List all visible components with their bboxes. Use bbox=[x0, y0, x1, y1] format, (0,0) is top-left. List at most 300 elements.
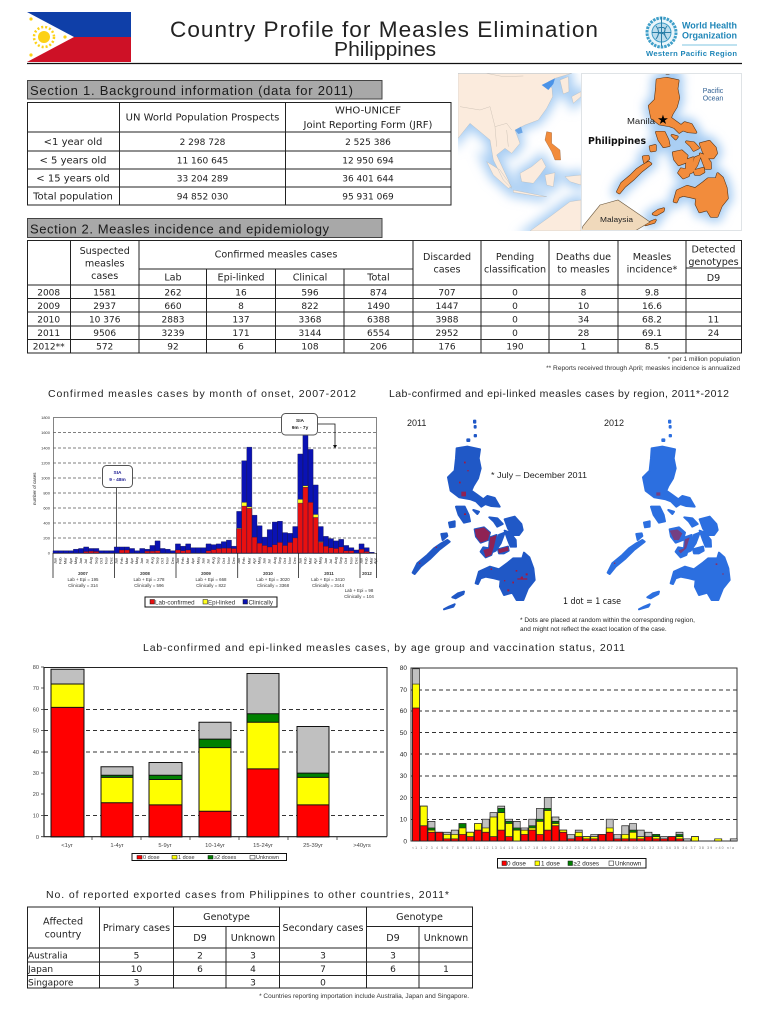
table header: D9 bbox=[193, 933, 207, 944]
x axis month labels: Sep bbox=[278, 557, 282, 564]
table header: Clinical bbox=[293, 272, 327, 284]
x axis month labels: Mar bbox=[247, 557, 251, 564]
icon: WHO logo: Organization bbox=[682, 30, 737, 42]
y axis labels: 200 bbox=[43, 536, 51, 540]
y axis labels: 0 bbox=[48, 550, 51, 556]
table: measles incidence and epidemiology: 171 bbox=[232, 329, 250, 339]
text: Pacific Ocean label: Ocean bbox=[703, 96, 723, 102]
text: Manila label: Manila bbox=[627, 117, 656, 126]
table: background information: 12 950 694 bbox=[342, 156, 394, 166]
table header: incidence* bbox=[627, 264, 678, 276]
year summaries: Lab + Epi = 98 bbox=[345, 588, 374, 593]
y axis labels: 1600 bbox=[41, 430, 51, 435]
table: background information: 33 204 289 bbox=[177, 174, 229, 184]
icon: WHO logo bbox=[646, 17, 737, 58]
x axis month labels: Feb bbox=[120, 557, 124, 564]
table header: D9 bbox=[386, 933, 400, 944]
note: July to December 2011: * July – December 2011 bbox=[491, 470, 587, 480]
x axis month labels: Oct bbox=[283, 557, 287, 564]
x axis month labels: Apr bbox=[130, 557, 134, 564]
y axis labels: 30 bbox=[33, 771, 39, 777]
y axis labels: 50 bbox=[33, 728, 39, 734]
table: exported cases: 3 bbox=[390, 952, 396, 962]
x axis labels: <1yr bbox=[61, 843, 73, 849]
table: measles incidence and epidemiology: 2012** bbox=[33, 342, 65, 352]
table: measles incidence and epidemiology: 3144 bbox=[299, 329, 322, 339]
x axis month labels: Mar bbox=[64, 557, 68, 564]
table header: Suspected bbox=[80, 246, 130, 257]
x axis month labels: Jun bbox=[201, 558, 205, 564]
title bbox=[170, 17, 599, 61]
table: measles incidence and epidemiology: 2883 bbox=[162, 316, 184, 326]
table: measles incidence and epidemiology: 2937 bbox=[93, 302, 116, 312]
y axis labels: 60 bbox=[33, 708, 39, 714]
x axis month labels: Sep bbox=[156, 557, 160, 564]
heading: section 1: Section 1. Background information (data for 2011) bbox=[30, 83, 353, 98]
legend: ≥2 doses bbox=[574, 860, 599, 868]
table: measles incidence and epidemiology: 2009 bbox=[37, 302, 60, 312]
table: measles incidence and epidemiology: 2010 bbox=[37, 316, 60, 326]
maps: cases by region bbox=[407, 418, 730, 633]
y axis labels: 10 bbox=[33, 814, 39, 820]
x axis month labels: May bbox=[258, 557, 262, 564]
table: measles incidence and epidemiology: 69.1 bbox=[642, 329, 662, 339]
legend: Unknown bbox=[615, 860, 642, 868]
table header: Primary cases bbox=[103, 923, 170, 934]
table: measles incidence and epidemiology: 0 bbox=[512, 288, 518, 298]
legend: Unknown bbox=[256, 855, 279, 861]
x axis month labels: Oct bbox=[99, 557, 103, 564]
table: measles incidence and epidemiology: 28 bbox=[578, 329, 589, 339]
y axis labels: 20 bbox=[400, 795, 407, 802]
table header: Joint Reporting Form (JRF) bbox=[303, 120, 433, 131]
y axis labels: 30 bbox=[400, 773, 407, 780]
x axis month labels: Jul bbox=[206, 559, 210, 564]
text: Malaysia label: Malaysia bbox=[600, 215, 634, 224]
year summaries: Lab + Epi = 278 bbox=[133, 577, 165, 582]
x axis month labels bbox=[54, 557, 378, 564]
table: exported cases: 7 bbox=[320, 965, 326, 975]
table header: genotypes bbox=[688, 257, 739, 268]
y axis labels: 0 bbox=[36, 835, 39, 841]
x axis month labels: May bbox=[319, 557, 323, 564]
y axis labels: 1800 bbox=[41, 415, 51, 420]
table: measles incidence and epidemiology bbox=[28, 240, 742, 353]
table: measles incidence and epidemiology: 1581 bbox=[93, 288, 116, 298]
table: measles incidence and epidemiology: 874 bbox=[370, 288, 387, 298]
year summaries: Clinically = 3144 bbox=[312, 583, 345, 588]
table: exported cases: 3 bbox=[250, 952, 256, 962]
x axis month labels: Jun bbox=[263, 558, 267, 564]
note: dots placed at random bbox=[520, 617, 695, 633]
legend: Epi-linked bbox=[208, 600, 236, 606]
icon: WHO logo: Western Pacific Region bbox=[646, 49, 737, 58]
table header bbox=[43, 912, 468, 944]
y axis labels: 80 bbox=[400, 665, 407, 672]
map: 2011 bbox=[407, 418, 535, 609]
year summaries: Clinically = 596 bbox=[134, 583, 164, 588]
x axis labels: 5-9yr bbox=[158, 843, 172, 849]
year summaries: 2011 bbox=[324, 571, 334, 576]
x axis month labels: Jan bbox=[115, 558, 119, 564]
x axis month labels: Feb bbox=[303, 557, 307, 564]
icon: Philippine flag bbox=[27, 12, 131, 62]
table header: Unknown bbox=[424, 933, 468, 944]
table: measles incidence and epidemiology: 10 bbox=[578, 302, 589, 312]
table: background information: 94 852 030 bbox=[177, 192, 229, 202]
icon: WHO logo: World Health bbox=[682, 20, 737, 32]
x axis month labels: Apr bbox=[191, 557, 195, 564]
table: measles incidence and epidemiology: 3988 bbox=[436, 316, 459, 326]
x axis month labels: Dec bbox=[232, 557, 236, 564]
x axis month labels: Nov bbox=[166, 557, 170, 564]
table: measles incidence and epidemiology: 596 bbox=[301, 288, 319, 298]
table header: Detected bbox=[692, 244, 735, 256]
table: measles incidence and epidemiology: 572 bbox=[96, 342, 113, 352]
y axis labels: 20 bbox=[33, 792, 39, 798]
table: measles incidence and epidemiology: 6 bbox=[238, 342, 244, 352]
table: measles incidence and epidemiology: 9506 bbox=[93, 329, 116, 339]
table: measles incidence and epidemiology: 2008 bbox=[37, 288, 60, 298]
legend: 0 dose bbox=[507, 860, 526, 868]
y axis labels: 10 bbox=[400, 816, 407, 824]
table: measles incidence and epidemiology: 0 bbox=[512, 316, 518, 326]
x axis month labels: Oct bbox=[222, 557, 226, 564]
table header: UN World Population Prospects bbox=[126, 112, 279, 124]
stacked bars bbox=[51, 669, 329, 837]
chart: cases by single year of age bbox=[400, 665, 737, 868]
map: Southeast Asia bbox=[458, 73, 581, 231]
table header: Measles bbox=[633, 252, 671, 263]
table header: Lab bbox=[164, 272, 182, 284]
y axis labels: 1000 bbox=[41, 476, 51, 480]
legend: 0 dose bbox=[143, 855, 160, 861]
x axis month labels: Jan bbox=[360, 558, 364, 564]
table: background information bbox=[28, 102, 451, 205]
table: exported cases: 6 bbox=[390, 965, 396, 975]
x axis month labels: Sep bbox=[94, 557, 98, 564]
table: background information: Total population bbox=[32, 192, 113, 202]
stacked bars bbox=[53, 417, 374, 553]
legend bbox=[145, 597, 277, 607]
table header: Total bbox=[366, 272, 390, 284]
table: measles incidence and epidemiology: 68.2 bbox=[642, 316, 662, 326]
y axis title: number of cases bbox=[32, 472, 37, 505]
x axis month labels: Mar bbox=[186, 557, 190, 564]
table header: Affected bbox=[43, 916, 83, 928]
x axis month labels: Feb bbox=[242, 557, 246, 564]
table: exported cases: Australia bbox=[28, 952, 68, 962]
callout: SIA 9-48m bbox=[102, 466, 132, 547]
table header: classification bbox=[484, 264, 546, 276]
x axis month labels: Nov bbox=[104, 557, 108, 564]
table header: Deaths due bbox=[556, 252, 611, 263]
heading: section 2: Section 2. Measles incidence and epidemiology bbox=[30, 222, 330, 236]
x axis labels: 25-39yr bbox=[303, 843, 323, 849]
table: measles incidence and epidemiology: 16.6 bbox=[642, 302, 662, 312]
table: exported cases: 6 bbox=[197, 965, 203, 975]
table: exported cases: 4 bbox=[250, 965, 256, 975]
x axis month labels: Mar bbox=[370, 557, 374, 564]
table: exported cases: 0 bbox=[320, 978, 326, 988]
x axis month labels: Sep bbox=[217, 557, 221, 564]
x axis month labels: Jun bbox=[324, 558, 328, 564]
table: exported cases: Singapore bbox=[28, 978, 74, 988]
table header: Confirmed measles cases bbox=[215, 250, 337, 260]
map: 2012: 2012 bbox=[604, 418, 624, 428]
table header: measles bbox=[85, 258, 125, 270]
heading: cases by region maps: Lab-confirmed and epi-linked measles cases by region, 2011*-2012 bbox=[389, 388, 729, 400]
y axis labels: 1400 bbox=[41, 446, 51, 450]
map: 2011: 2011 bbox=[407, 418, 426, 428]
y axis labels: 80 bbox=[33, 665, 39, 671]
x axis month labels: Aug bbox=[212, 557, 216, 564]
title: Country Profile for Measles Elimination bbox=[170, 17, 599, 42]
y axis labels: 70 bbox=[400, 687, 407, 694]
footnotes: section 2: * per 1 million population bbox=[668, 356, 740, 363]
year summaries: Lab + Epi = 3020 bbox=[256, 577, 290, 582]
year summaries: 2010 bbox=[263, 571, 273, 576]
x axis month labels: Oct bbox=[161, 557, 165, 564]
table header: cases bbox=[433, 264, 461, 276]
heading: cases by month chart: Confirmed measles cases by month of onset, 2007-2012 bbox=[48, 388, 356, 400]
table: exported cases: 3 bbox=[320, 952, 326, 962]
table: measles incidence and epidemiology: 1447 bbox=[436, 302, 458, 312]
table: measles incidence and epidemiology: 262 bbox=[164, 288, 182, 298]
table header bbox=[80, 244, 739, 284]
table: exported cases bbox=[27, 907, 472, 988]
text: Pacific Ocean label bbox=[703, 88, 724, 102]
x axis month labels: Mar bbox=[125, 557, 129, 564]
note: dots placed at random: and might not reflect the exact location of the case. bbox=[520, 626, 667, 633]
x axis labels: <1 1 2 3 4 5 6 7 8 9 10 11 12 13 14 15 16 17 18 19 20 21 22 23 24 25 26 27 28 29 30 31 32 33 34 35 36 37 38 39 >40 n/a bbox=[412, 846, 734, 850]
year summaries: Lab + Epi = 668 bbox=[195, 577, 227, 582]
table: background information: 2 525 386 bbox=[345, 138, 391, 148]
table: measles incidence and epidemiology: 8.5 bbox=[645, 342, 659, 352]
table: exported cases: 2 bbox=[197, 952, 203, 962]
year summaries bbox=[67, 571, 374, 599]
x axis month labels: Apr bbox=[69, 557, 73, 564]
year summaries: Clinically = 104 bbox=[344, 594, 374, 599]
x axis month labels: May bbox=[196, 557, 200, 564]
legend: 1 dose bbox=[541, 860, 560, 868]
table header: Genotype bbox=[203, 912, 250, 923]
x axis month labels: May bbox=[74, 557, 78, 564]
table header: to measles bbox=[557, 264, 610, 276]
table: measles incidence and epidemiology: 0 bbox=[512, 302, 518, 312]
table: measles incidence and epidemiology: 24 bbox=[708, 329, 719, 339]
y axis labels: 1200 bbox=[41, 460, 51, 466]
y axis labels: 60 bbox=[400, 708, 407, 715]
y axis labels: 0 bbox=[403, 838, 407, 846]
x axis month labels: Mar bbox=[308, 557, 312, 564]
year summaries: Clinically = 314 bbox=[68, 583, 98, 588]
table: background information: < 15 years old bbox=[36, 174, 110, 184]
year summaries: 2008 bbox=[140, 571, 150, 576]
stacked bars bbox=[412, 669, 737, 841]
table: measles incidence and epidemiology: 3239 bbox=[162, 329, 185, 339]
table header: Unknown bbox=[231, 933, 275, 944]
x axis month labels: Nov bbox=[288, 557, 292, 564]
heading: section 2 bbox=[28, 218, 382, 238]
x axis month labels: Jul bbox=[145, 559, 149, 564]
x axis month labels: Sep bbox=[339, 557, 343, 564]
y axis labels: 400 bbox=[43, 520, 51, 526]
x axis month labels: Jan bbox=[176, 558, 180, 564]
icon: star for Manila: ★ bbox=[657, 112, 669, 127]
table header: Epi-linked bbox=[218, 272, 264, 284]
x axis month labels: Feb bbox=[181, 557, 185, 564]
x axis month labels: Aug bbox=[89, 557, 93, 564]
table: background information: 2 298 728 bbox=[180, 138, 226, 148]
table: measles incidence and epidemiology: 9.8 bbox=[645, 288, 659, 298]
legend: 1 dose bbox=[178, 855, 195, 861]
x axis month labels: Dec bbox=[171, 557, 175, 564]
chart: confirmed measles cases by month bbox=[32, 414, 378, 607]
table: measles incidence and epidemiology: 1 bbox=[581, 342, 586, 352]
y axis labels: 40 bbox=[33, 750, 39, 756]
table: measles incidence and epidemiology: 176 bbox=[438, 342, 456, 352]
callout: SIA 9-48m: SIA bbox=[114, 470, 122, 476]
year summaries: Clinically = 3368 bbox=[257, 583, 290, 588]
x axis month labels: Jun bbox=[140, 558, 144, 564]
legend: Lab-confirmed bbox=[155, 600, 195, 606]
year summaries: Clinically = 822 bbox=[196, 583, 226, 588]
table: measles incidence and epidemiology: 0 bbox=[512, 329, 518, 339]
table: measles incidence and epidemiology: 3368 bbox=[299, 316, 322, 326]
chart: cases by age group bbox=[33, 665, 387, 861]
table: measles incidence and epidemiology: 6554 bbox=[367, 329, 390, 339]
table: background information: 36 401 644 bbox=[342, 174, 394, 184]
x axis month labels: Aug bbox=[150, 557, 154, 564]
table: background information: <1 year old bbox=[44, 137, 102, 148]
table: measles incidence and epidemiology: 8 bbox=[238, 302, 244, 312]
table: background information: 11 160 645 bbox=[177, 156, 228, 166]
x axis month labels: Feb bbox=[59, 557, 63, 564]
heading: age group and vaccination status: Lab-confirmed and epi-linked measles cases, by age group and vaccination status, 2011 bbox=[143, 642, 625, 654]
table: measles incidence and epidemiology: 16 bbox=[235, 288, 247, 298]
x axis month labels: Jul bbox=[329, 559, 333, 564]
table: background information: 95 931 069 bbox=[342, 192, 394, 202]
y axis labels: 70 bbox=[33, 686, 39, 692]
legend bbox=[132, 854, 286, 861]
x axis month labels: Jan bbox=[237, 558, 241, 564]
legend: ≥2 doses bbox=[214, 855, 237, 861]
x axis month labels: Jan bbox=[298, 558, 302, 564]
x axis month labels: Dec bbox=[354, 557, 358, 564]
table: measles incidence and epidemiology: 108 bbox=[301, 342, 319, 352]
table header bbox=[126, 106, 433, 131]
x axis month labels: Jun bbox=[79, 558, 83, 564]
text: Pacific Ocean label: Pacific bbox=[703, 88, 724, 95]
x axis month labels: Apr bbox=[374, 557, 378, 564]
table: exported cases: 3 bbox=[134, 978, 139, 988]
callout: SIA 9m-7y bbox=[282, 414, 337, 448]
table header: D9 bbox=[707, 273, 720, 284]
note: 1 dot = 1 case: 1 dot = 1 case bbox=[563, 597, 621, 607]
table: measles incidence and epidemiology: 2952 bbox=[436, 329, 458, 339]
table: measles incidence and epidemiology: 34 bbox=[578, 316, 589, 326]
table: measles incidence and epidemiology: 707 bbox=[438, 288, 456, 298]
table header: country bbox=[45, 930, 82, 940]
year summaries: 2009 bbox=[201, 571, 211, 576]
map: Philippines detail bbox=[581, 55, 742, 231]
y axis labels bbox=[400, 665, 407, 846]
callout: SIA 9m-7y: SIA bbox=[296, 418, 305, 424]
x axis month labels: Jan bbox=[54, 558, 58, 564]
table header: WHO-UNICEF bbox=[335, 106, 401, 116]
table: measles incidence and epidemiology: 11 bbox=[708, 316, 719, 326]
x axis labels: 10-14yr bbox=[205, 843, 225, 849]
x axis month labels: Feb bbox=[365, 557, 369, 564]
table header: cases bbox=[91, 271, 118, 282]
footnotes: section 2 bbox=[546, 356, 740, 372]
table: measles incidence and epidemiology: 190 bbox=[506, 342, 524, 352]
x axis labels bbox=[61, 843, 371, 849]
table: measles incidence and epidemiology: 6388 bbox=[367, 316, 390, 326]
table header: Secondary cases bbox=[283, 923, 363, 934]
text: Philippines label: Philippines bbox=[588, 136, 646, 147]
x axis month labels: Aug bbox=[273, 557, 277, 564]
x axis month labels: Jul bbox=[84, 559, 88, 564]
year summaries: Lab + Epi = 3410 bbox=[311, 577, 345, 582]
title: Philippines bbox=[334, 39, 436, 61]
callout: SIA 9m-7y: 9m - 7y bbox=[292, 425, 309, 431]
legend bbox=[498, 858, 646, 868]
table: exported cases: 1 bbox=[443, 965, 449, 975]
y axis labels: 800 bbox=[43, 490, 51, 496]
x axis month labels: Dec bbox=[293, 557, 297, 564]
x axis labels: 1-4yr bbox=[110, 843, 124, 849]
table: measles incidence and epidemiology: 2011 bbox=[37, 329, 60, 339]
x axis labels: >40yrs bbox=[353, 843, 371, 849]
legend: Clinically bbox=[248, 600, 274, 606]
x axis month labels: Nov bbox=[349, 557, 353, 564]
x axis labels: 15-24yr bbox=[253, 843, 273, 849]
year summaries: 2007 bbox=[78, 571, 88, 576]
table: measles incidence and epidemiology: 660 bbox=[164, 302, 182, 312]
y axis labels bbox=[41, 415, 51, 556]
x axis month labels: Dec bbox=[110, 557, 114, 564]
table: exported cases: 5 bbox=[134, 952, 139, 962]
callout: SIA 9-48m: 9 - 48m bbox=[109, 477, 126, 483]
x axis month labels: Apr bbox=[314, 557, 318, 564]
x axis month labels: Jul bbox=[268, 559, 272, 564]
year summaries: 2012 bbox=[362, 571, 372, 576]
map: 2012 bbox=[604, 418, 730, 609]
y axis labels bbox=[33, 665, 39, 841]
table: background information: < 5 years old bbox=[39, 156, 107, 166]
x axis month labels: Aug bbox=[334, 557, 338, 564]
note: dots placed at random: * Dots are placed at random within the corresponding region, bbox=[520, 617, 695, 624]
x axis month labels: May bbox=[135, 557, 139, 564]
table: exported cases: Japan bbox=[27, 965, 53, 975]
table: measles incidence and epidemiology: 8 bbox=[581, 288, 587, 298]
y axis labels: 600 bbox=[43, 506, 51, 510]
table: exported cases: 3 bbox=[250, 978, 256, 988]
table: measles incidence and epidemiology: 137 bbox=[232, 316, 250, 326]
year summaries: Lab + Epi = 195 bbox=[67, 577, 99, 582]
y axis labels: 40 bbox=[400, 752, 407, 758]
y axis labels: 50 bbox=[400, 730, 407, 737]
x axis month labels: Oct bbox=[344, 557, 348, 564]
heading: exported cases: No. of reported exported cases from Philippines to other countries, 2011* bbox=[46, 889, 449, 901]
table header: Discarded bbox=[423, 252, 471, 263]
table header: Genotype bbox=[396, 912, 443, 923]
table: measles incidence and epidemiology: 822 bbox=[301, 302, 319, 312]
x axis month labels: Nov bbox=[227, 557, 231, 564]
table: measles incidence and epidemiology: 1490 bbox=[367, 302, 390, 312]
